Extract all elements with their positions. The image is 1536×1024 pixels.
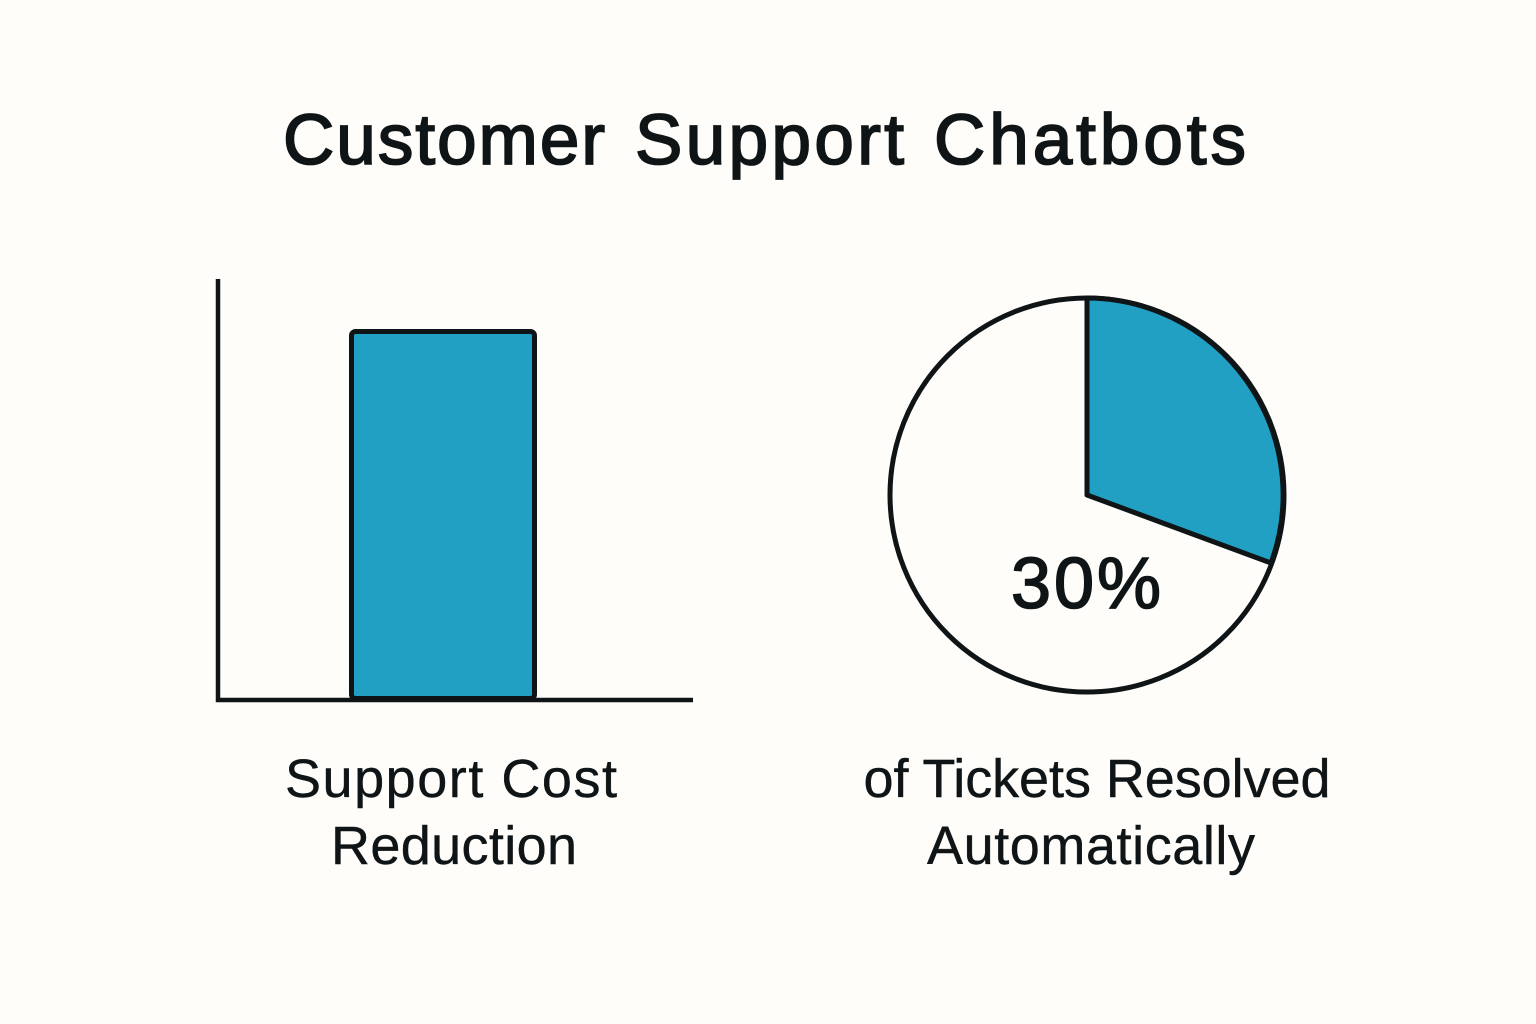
label: tickets resolved automatically: of Tickets Resolved [864, 749, 1330, 809]
panel: pie chart [890, 298, 1284, 692]
label: support cost reduction: Support Cost [285, 749, 617, 809]
pie slice 30% [1087, 298, 1283, 563]
label: support cost reduction [285, 749, 617, 876]
bar [352, 332, 534, 698]
panel: bar chart [218, 279, 693, 700]
title: Customer [283, 101, 605, 180]
title: Chatbots [934, 101, 1246, 180]
title: Support [635, 101, 904, 180]
pie background [890, 298, 1284, 692]
label: tickets resolved automatically [864, 749, 1330, 876]
label: support cost reduction: Reduction [331, 816, 577, 876]
label: tickets resolved automatically: Automatically [927, 816, 1255, 876]
chart axes [218, 279, 693, 700]
value: 30%: 30% [1011, 544, 1161, 624]
title [283, 101, 1246, 180]
